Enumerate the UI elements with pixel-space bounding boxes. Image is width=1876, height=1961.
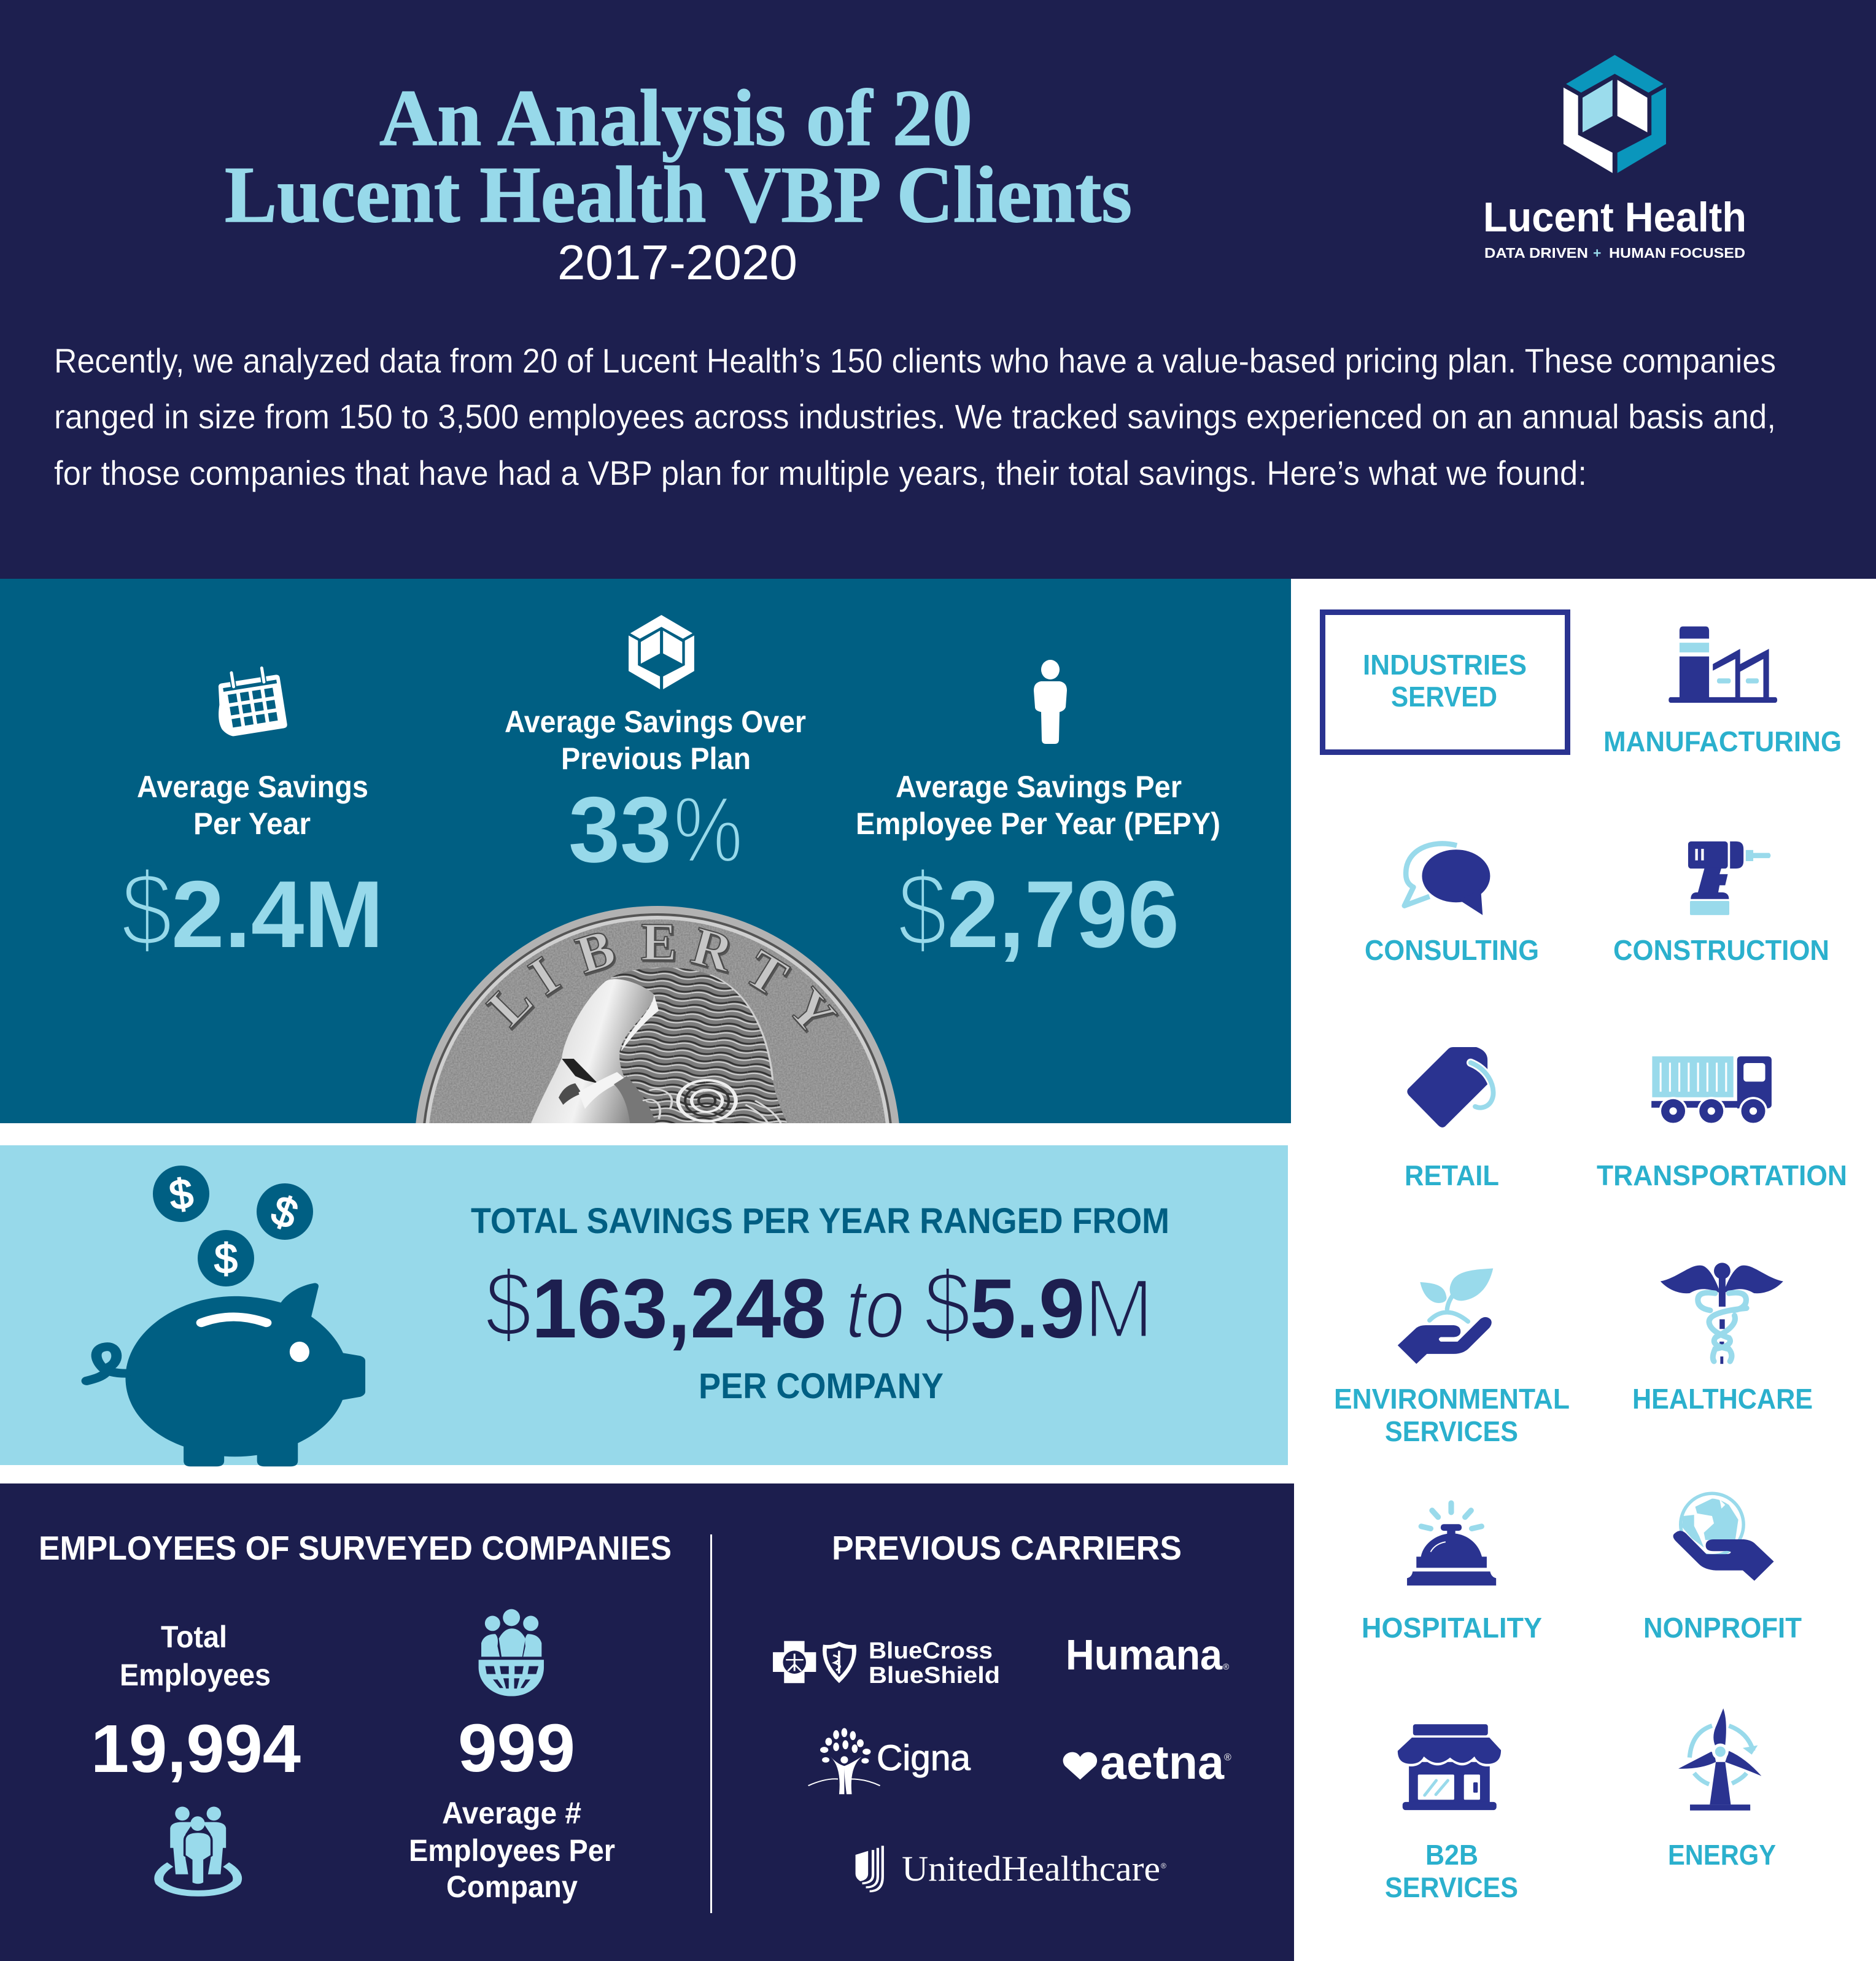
icon: piggy bank with coins: $ (166, 1170, 196, 1219)
icon: piggy bank with coins: $ (266, 1186, 303, 1238)
label: Per Year (193, 806, 311, 841)
coin portrait (531, 967, 787, 1123)
label: CONSULTING (1365, 934, 1539, 966)
icon: logo hexagon (1564, 55, 1666, 173)
stat: total employees label (120, 1620, 271, 1692)
value range: $ (924, 1252, 971, 1356)
value: % (673, 778, 743, 882)
logo: Humana: ® (1223, 1661, 1230, 1671)
heading: TOTAL SAVINGS PER YEAR RANGED FROM (471, 1201, 1169, 1241)
label: CONSTRUCTION (1613, 934, 1829, 966)
label: MANUFACTURING (1603, 725, 1842, 757)
label: HOSPITALITY (1362, 1612, 1542, 1644)
logo tagline: + (1593, 245, 1601, 261)
industry: healthcare (1632, 1263, 1813, 1415)
icon: piggy bank with coins: $ (214, 1236, 238, 1282)
label: Employee Per Year (PEPY) (856, 806, 1220, 841)
intro text: Recently, we analyzed data from 20 of Lucent Health’s 150 clients who have a value-based pricing plan. These companies (54, 341, 1776, 380)
value range: 163,248 (532, 1262, 826, 1356)
panel: total savings range (0, 1145, 1288, 1466)
heading: PREVIOUS CARRIERS (832, 1529, 1182, 1567)
value: 33 (568, 778, 672, 882)
icon: hand with plant (1398, 1268, 1493, 1364)
icon: service bell (1407, 1503, 1496, 1585)
label: Average Savings Over (505, 705, 806, 739)
label (1385, 1839, 1518, 1903)
intro text (54, 341, 1776, 492)
title: Lucent Health VBP Clients (225, 150, 1132, 239)
industry: hospitality (1362, 1503, 1542, 1644)
coin lettering: T (735, 938, 797, 1008)
icon: truck (1651, 1056, 1772, 1125)
icon: person (1034, 660, 1067, 744)
logo tagline (1484, 245, 1745, 261)
label: Previous Plan (561, 741, 751, 776)
value range: 5.9 (970, 1262, 1085, 1356)
label: SERVICES (1385, 1415, 1518, 1447)
title (225, 74, 1132, 239)
value range: to (846, 1262, 904, 1356)
stat: average employees label (409, 1796, 615, 1904)
value: $ (897, 851, 947, 969)
section: previous carriers (773, 1529, 1231, 1891)
label (137, 770, 368, 841)
value: $ (121, 851, 172, 969)
stat: average savings over previous plan (505, 615, 806, 882)
stat: average savings per year (121, 663, 384, 969)
value range: $ (485, 1252, 532, 1356)
label: HEALTHCARE (1632, 1383, 1813, 1415)
logo: UnitedHealthcare: UnitedHealthcare (902, 1849, 1160, 1889)
logo: Humana: Humana (1066, 1631, 1223, 1679)
coin lettering: I (519, 945, 570, 1007)
stat: average employees label: Company (446, 1870, 578, 1904)
value range (485, 1252, 1154, 1356)
industry: consulting (1365, 843, 1539, 966)
coin lettering: E (641, 913, 677, 972)
heading box: industries served: SERVED (1391, 681, 1497, 713)
logo wordmark: Lucent Health (1483, 194, 1746, 241)
intro text: for those companies that have had a VBP plan for multiple years, their total savings. Here’s what we found: (54, 454, 1587, 492)
logo tagline: HUMAN FOCUSED (1609, 245, 1745, 261)
stat: total employees label: Employees (120, 1658, 271, 1692)
icon: factory (1669, 627, 1777, 703)
intro text: ranged in size from 150 to 3,500 employees across industries. We tracked savings experienced on an annual basis and, (54, 397, 1776, 436)
label: TRANSPORTATION (1597, 1159, 1847, 1191)
logo: BlueCross BlueShield: BlueShield (869, 1663, 1000, 1688)
icon: calendar (212, 663, 288, 738)
logo: Lucent Health (1483, 55, 1746, 261)
logo: aetna: aetna (1100, 1735, 1225, 1789)
coin lettering (485, 924, 840, 1034)
stat: average employees value: 999 (458, 1711, 575, 1786)
icon: piggy bank with coins (87, 1166, 365, 1466)
label: Average Savings (137, 770, 368, 804)
heading box: industries served: INDUSTRIES (1363, 649, 1527, 681)
coin lettering: R (686, 916, 740, 984)
industry: construction (1613, 841, 1829, 966)
coin lettering: B (570, 918, 622, 986)
logo: Cigna (808, 1728, 971, 1794)
stat: average employees label: Employees Per (409, 1833, 615, 1868)
label: ENVIRONMENTAL (1334, 1383, 1570, 1415)
icon: speech bubbles (1405, 843, 1490, 915)
heading box: industries served (1322, 613, 1568, 752)
label: ENERGY (1668, 1839, 1776, 1871)
icon: caduceus (1661, 1263, 1783, 1364)
coin lettering: Y (777, 977, 847, 1046)
label (1334, 1383, 1570, 1447)
icon: price tag (1407, 1047, 1493, 1127)
icon: hand with globe (1673, 1493, 1774, 1580)
value: 2,796 (947, 861, 1179, 967)
panel: industries served (1294, 579, 1876, 1961)
stat: average employees label: Average # (442, 1796, 581, 1830)
logo tagline: DATA DRIVEN (1484, 245, 1588, 261)
industry: environmental services (1334, 1268, 1570, 1447)
industry: B2B services (1385, 1724, 1518, 1903)
label: NONPROFIT (1643, 1612, 1802, 1644)
panel: average savings stats (0, 579, 1291, 1123)
value: 2.4M (171, 861, 384, 967)
logo: UnitedHealthcare: ® (1161, 1862, 1166, 1870)
stat: total employees value: 19,994 (91, 1711, 301, 1787)
logo: aetna: ® (1224, 1752, 1231, 1763)
icon: drill (1688, 841, 1770, 915)
label: SERVICES (1385, 1871, 1518, 1903)
sub-label: PER COMPANY (699, 1366, 944, 1406)
panel: header (0, 0, 1876, 579)
title: An Analysis of 20 (379, 74, 972, 163)
industry: manufacturing (1603, 627, 1842, 757)
label (856, 770, 1220, 841)
panel: employees and carriers (0, 1483, 1294, 1961)
icon: wind turbine (1678, 1708, 1761, 1811)
illustration: quarter coin (416, 906, 899, 1123)
icon: storefront (1398, 1724, 1501, 1810)
stat: total employees label: Total (161, 1620, 227, 1654)
heading: EMPLOYEES OF SURVEYED COMPANIES (39, 1529, 672, 1567)
label: RETAIL (1405, 1159, 1499, 1191)
industry: nonprofit (1643, 1493, 1802, 1644)
value range: M (1083, 1262, 1154, 1356)
coin lettering: L (476, 970, 545, 1038)
section: employees of surveyed companies (39, 1529, 672, 1904)
industry: energy (1668, 1708, 1776, 1871)
icon: group of people (159, 1806, 238, 1893)
icon: hexagon mark (629, 615, 694, 689)
logo: BlueCross BlueShield (773, 1638, 1000, 1688)
logo: Cigna: Cigna (877, 1738, 971, 1778)
label (505, 705, 806, 776)
logo: BlueCross BlueShield: BlueCross (869, 1638, 993, 1664)
date range: 2017-2020 (557, 235, 797, 290)
label: Average Savings Per (896, 770, 1182, 804)
label: B2B (1425, 1839, 1478, 1871)
stat: average savings per employee per year (856, 660, 1220, 969)
icon: people over globe (479, 1609, 544, 1696)
industry: retail (1405, 1047, 1499, 1191)
value (568, 778, 743, 882)
industry: transportation (1597, 1056, 1847, 1191)
